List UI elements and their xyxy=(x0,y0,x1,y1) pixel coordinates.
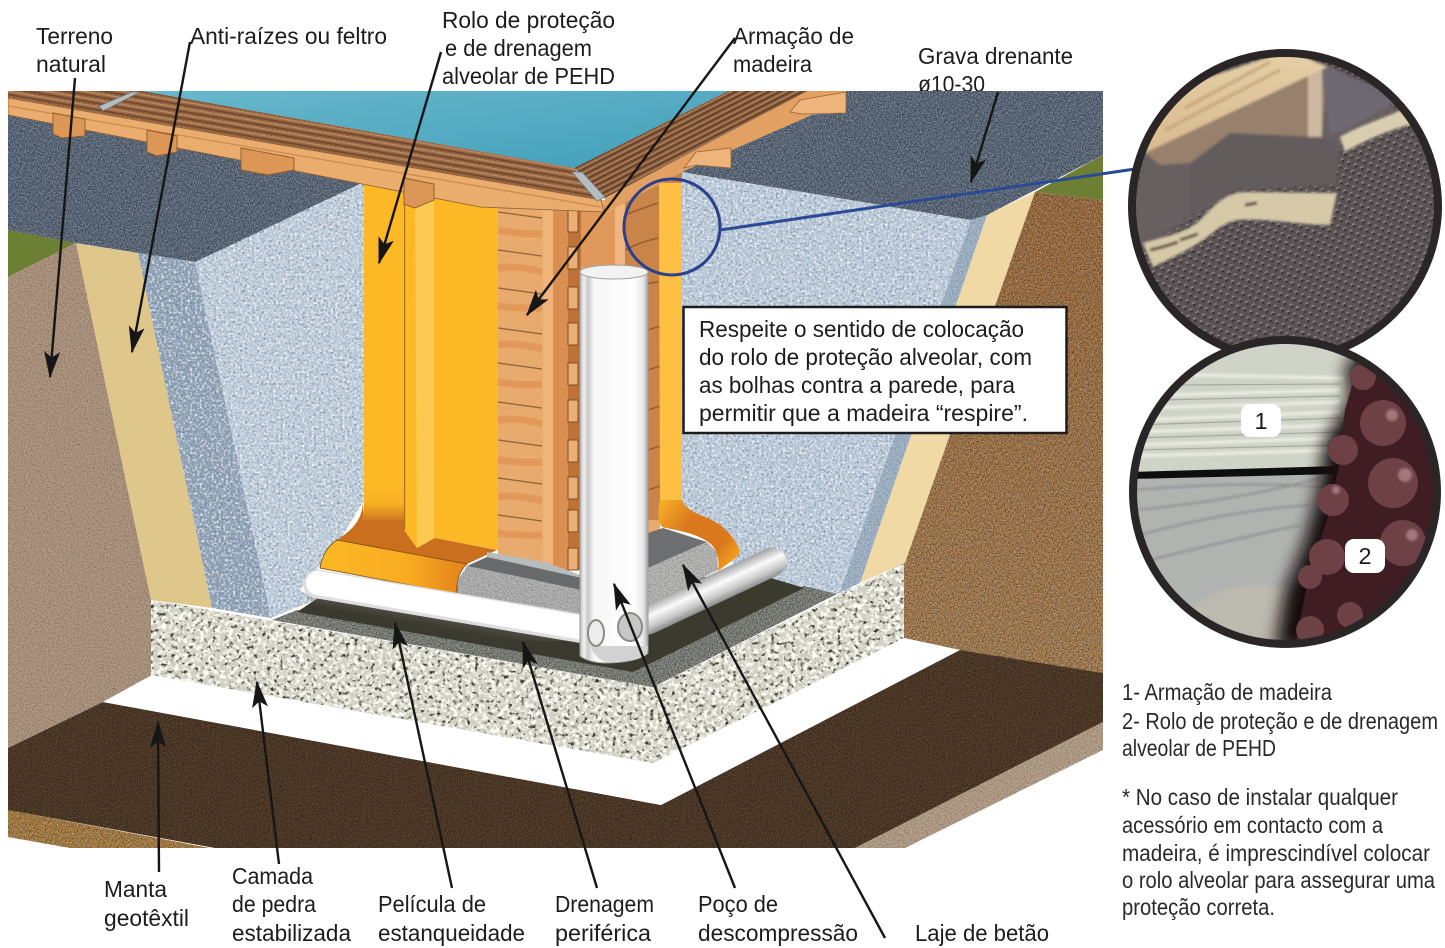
drainage gravel side right xyxy=(840,215,987,592)
roll base top left xyxy=(337,500,497,564)
label: geotextile: geotêxtil xyxy=(104,905,189,931)
roll base front left xyxy=(320,540,467,594)
legend notes: acessório em contacto com a xyxy=(1122,812,1383,838)
badge 1: 1 xyxy=(1254,408,1268,434)
label: waterproof film: estanqueidade xyxy=(378,920,525,946)
corner bracket xyxy=(572,172,605,201)
label: geotextile xyxy=(104,876,189,931)
label: wood frame: Armação de xyxy=(733,23,854,49)
label: natural ground: Terreno xyxy=(36,23,113,49)
deck right xyxy=(574,91,808,198)
label: stone layer: estabilizada xyxy=(232,920,352,946)
grass right xyxy=(1035,155,1103,200)
label: natural ground: natural xyxy=(36,51,106,77)
arrow: protection roll xyxy=(379,52,441,263)
photo: bubble membrane detail xyxy=(1125,45,1445,365)
arrow: drainage xyxy=(523,642,597,888)
fascia joint line xyxy=(8,106,601,207)
label: decompression well: Poço de xyxy=(698,891,778,917)
illustration: pool wall cross-section xyxy=(8,91,1103,848)
geotextile side left xyxy=(8,810,210,848)
photo: wood and bubbles detail xyxy=(1130,335,1445,650)
label: stone layer xyxy=(232,863,352,946)
fascia left xyxy=(8,98,604,212)
callout: Respeite o sentido de colocação xyxy=(699,316,1024,342)
label: concrete slab: Laje de betão xyxy=(915,920,1049,946)
label: anti-root: Anti-raízes ou feltro xyxy=(190,23,387,49)
legend notes: 1- Armação de madeira xyxy=(1122,679,1332,705)
anti-root felt left xyxy=(76,243,212,608)
label: stone layer: Camada xyxy=(232,863,314,889)
arrow: wood frame xyxy=(527,38,735,315)
label: protection roll: alveolar de PEHD xyxy=(442,63,615,89)
callout xyxy=(684,307,1066,433)
deck left xyxy=(8,91,601,200)
legend notes: proteção correta. xyxy=(1122,894,1275,920)
badge 1 xyxy=(1241,404,1281,437)
drainage pipe right xyxy=(648,562,772,620)
arrow: anti-root xyxy=(132,42,190,352)
label: decompression well: descompressão xyxy=(698,920,858,946)
label: waterproof film: Película de xyxy=(378,891,486,917)
joists left xyxy=(53,113,434,208)
label: wood frame: madeira xyxy=(733,51,813,77)
gravel surface left xyxy=(8,110,364,262)
roll bend right xyxy=(658,500,740,571)
drainage gravel side left xyxy=(138,253,271,618)
deck bracket xyxy=(99,92,140,111)
label: geotextile: Manta xyxy=(104,876,168,902)
label: drainage: Drenagem xyxy=(555,891,654,917)
label: draining gravel: Grava drenante xyxy=(918,43,1073,69)
decompression well xyxy=(580,265,648,663)
label: drainage xyxy=(555,891,654,946)
callout: as bolhas contra a parede, para xyxy=(699,372,1016,398)
label: decompression well xyxy=(698,891,858,946)
label: protection roll: e de drenagem xyxy=(445,35,592,61)
roll bend left xyxy=(364,490,404,530)
joists right xyxy=(684,92,846,168)
water xyxy=(142,91,728,168)
waterproof film xyxy=(297,575,804,672)
protection roll left wall (yellow) xyxy=(364,172,498,550)
geotextile floor xyxy=(8,650,1103,848)
white drainage pipe left xyxy=(318,583,590,636)
fascia right xyxy=(605,91,846,214)
arrow: stone layer xyxy=(257,682,279,864)
gravel surface right xyxy=(682,91,1103,220)
anti-root felt right xyxy=(860,192,1035,583)
label: stone layer: de pedra xyxy=(232,891,317,917)
detail circle on wall xyxy=(624,179,720,275)
concrete slab right xyxy=(648,528,718,606)
label: protection roll: Rolo de proteção xyxy=(442,7,615,33)
stone top strip xyxy=(272,586,837,687)
grass left xyxy=(8,230,76,277)
natural soil right xyxy=(904,192,1103,673)
natural soil left xyxy=(8,243,152,748)
callout: do rolo de proteção alveolar, com xyxy=(699,344,1032,370)
connector line to detail photo xyxy=(720,169,1135,230)
stabilised stone layer xyxy=(151,563,904,763)
label: wood frame xyxy=(733,23,854,77)
floor edge right xyxy=(855,722,1103,848)
arrow: natural ground xyxy=(50,78,75,377)
concrete slab left xyxy=(457,552,582,618)
badge 2: 2 xyxy=(1358,543,1372,569)
callout: permitir que a madeira “respire”. xyxy=(699,400,1028,426)
white geotextile sheet xyxy=(103,638,960,805)
legend notes: alveolar de PEHD xyxy=(1122,735,1276,761)
arrow: well xyxy=(614,584,735,888)
arrow: geotextile xyxy=(158,722,159,872)
wooden wall planks xyxy=(498,168,682,570)
drainage gravel face right xyxy=(682,172,971,600)
label: waterproof film xyxy=(378,891,525,946)
drainage gravel face left xyxy=(195,178,364,618)
arrow: waterproof film xyxy=(395,623,452,888)
legend notes: * No caso de instalar qualquer xyxy=(1122,784,1398,810)
legend notes xyxy=(1122,679,1438,920)
arrow: gravel xyxy=(971,92,998,182)
arrow: slab xyxy=(683,565,885,938)
label: drainage: periférica xyxy=(555,920,652,946)
badge 2 xyxy=(1345,539,1385,573)
label: protection roll xyxy=(442,7,615,89)
label: natural ground xyxy=(36,23,113,77)
label: gravel dimension: ø10-30 xyxy=(918,71,985,97)
yellow roll right wall xyxy=(659,183,682,510)
roll upper bend left xyxy=(362,492,404,520)
